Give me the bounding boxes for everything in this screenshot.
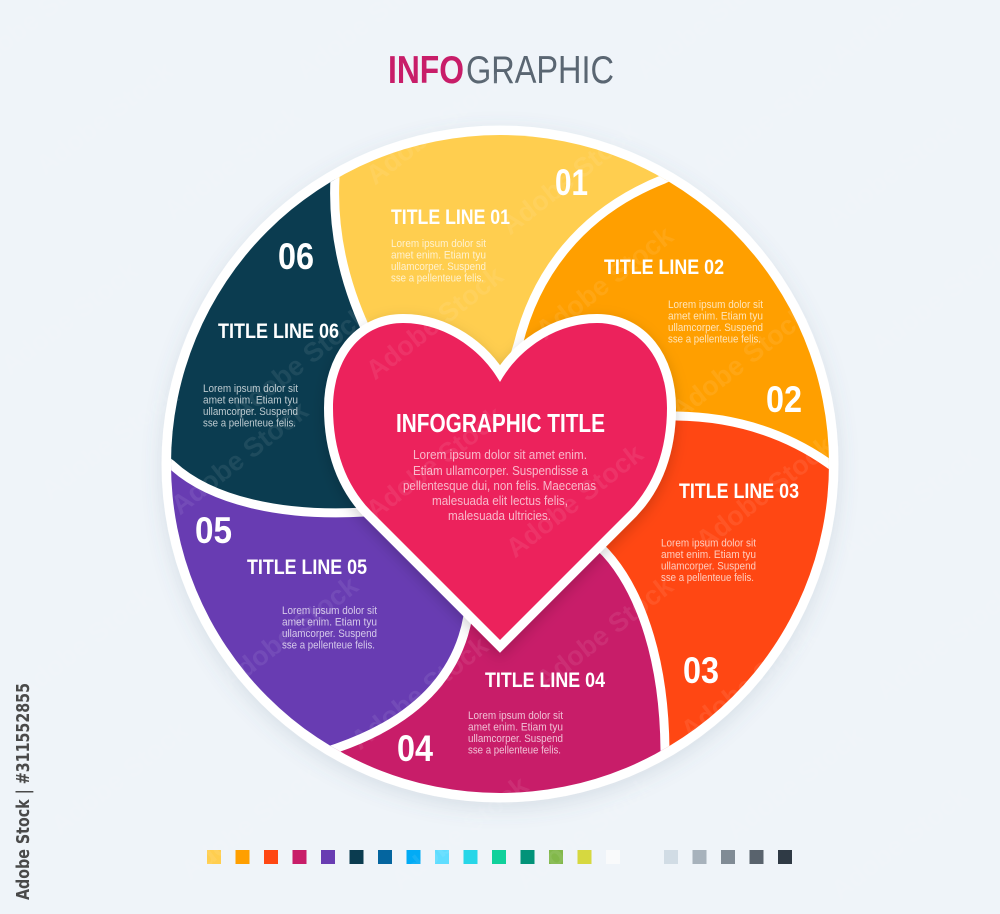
stock watermark overlay: Adobe Stock (215, 570, 364, 696)
segment 03 text (661, 480, 799, 691)
heart text: INFOGRAPHIC TITLE (396, 410, 605, 438)
stock watermark overlay: Adobe Stock (175, 760, 324, 886)
segment 04 text (397, 669, 605, 769)
segment 06 text (203, 236, 339, 430)
white circle ring (162, 126, 838, 802)
heart text: malesuada elit lectus felis, (432, 494, 568, 508)
segment 03 text: amet enim. Etiam tyu (661, 549, 756, 561)
segment 01 text: sse a pellenteue felis. (391, 272, 484, 284)
stock watermark overlay: Adobe Stock (510, 770, 659, 896)
segment 05 text: ullamcorper. Suspend (282, 628, 377, 640)
segment 04 text: amet enim. Etiam tyu (468, 722, 563, 734)
stock watermark overlay: Adobe Stock (360, 65, 509, 191)
stock watermark overlay: Adobe Stock (165, 395, 314, 521)
stock watermark overlay: Adobe Stock (675, 620, 824, 746)
segment 04 text: ullamcorper. Suspend (468, 733, 563, 745)
title: GRAPHIC (466, 49, 614, 92)
segment 05 text: sse a pellenteue felis. (282, 640, 375, 652)
segment 06 text: 06 (278, 236, 314, 277)
wheel segments (171, 135, 829, 793)
heart text: malesuada ultricies. (448, 509, 551, 523)
heart text (396, 410, 605, 523)
stock watermark overlay: Adobe Stock (345, 630, 494, 756)
segment 01 text: amet enim. Etiam tyu (391, 250, 486, 262)
segment 02 text: TITLE LINE 02 (604, 256, 724, 279)
heart text: Etiam ullamcorper. Suspendisse a (413, 464, 588, 478)
segment 03 text: TITLE LINE 03 (679, 480, 799, 503)
segment 02 text: Lorem ipsum dolor sit (668, 299, 763, 311)
segment 01 text: 01 (555, 162, 588, 203)
stock watermark overlay: Adobe Stock (530, 570, 679, 696)
segment 02 text: ullamcorper. Suspend (668, 322, 763, 334)
stock watermark overlay: Adobe Stock (720, 720, 869, 846)
segment 05 text: 05 (195, 510, 232, 551)
stock watermark overlay: Adobe Stock (500, 438, 649, 564)
segment 04 text: 04 (397, 728, 433, 769)
segment 01 text: ullamcorper. Suspend (391, 261, 486, 273)
stock watermark overlay: Adobe Stock (825, 780, 974, 906)
stock watermark overlay: Adobe Stock (695, 55, 844, 181)
segment 05 text: TITLE LINE 05 (247, 556, 367, 579)
segment 01 fill (335, 135, 664, 366)
stock watermark overlay: Adobe Stock (10, 580, 159, 706)
colour palette swatches (207, 850, 792, 864)
stock watermark overlay: Adobe Stock (690, 430, 839, 556)
stock watermark overlay: Adobe Stock (225, 300, 374, 426)
segment 06 text: Lorem ipsum dolor sit (203, 383, 298, 395)
segment 05 text: amet enim. Etiam tyu (282, 616, 377, 628)
segment 01 text (391, 162, 588, 284)
segment 02 text: amet enim. Etiam tyu (668, 310, 763, 322)
stock watermark overlay: Adobe Stock (385, 770, 534, 896)
stock watermark overlay: Adobe Stock (360, 400, 509, 526)
stock watermark overlay: Adobe Stock (820, 108, 969, 234)
stock watermark overlay: Adobe Stock (665, 300, 814, 426)
segment 04 text: Lorem ipsum dolor sit (468, 710, 563, 722)
stock watermark overlay: Adobe Stock (158, 100, 307, 226)
stock watermark overlay: Adobe Stock (495, 115, 644, 241)
segment 03 text: Lorem ipsum dolor sit (661, 538, 756, 550)
segment 04 text: TITLE LINE 04 (485, 669, 605, 692)
stock watermark overlay: Adobe Stock (30, 55, 179, 181)
segment 02 text (604, 256, 802, 420)
segment 04 text: sse a pellenteue felis. (468, 744, 561, 756)
title: INFO (388, 49, 464, 92)
stock watermark overlay: Adobe Stock (45, 715, 194, 841)
segment 06 text: sse a pellenteue felis. (203, 418, 296, 430)
segment 05 fill (171, 465, 464, 749)
segment 06 fill (171, 180, 360, 508)
segment 02 text: 02 (766, 379, 802, 420)
segment 05 text: Lorem ipsum dolor sit (282, 605, 377, 617)
segment 04 fill (336, 553, 665, 793)
segment 05 text (195, 510, 377, 652)
segment 03 text: 03 (683, 650, 719, 691)
heart (333, 323, 667, 640)
stock watermark overlay: Adobe Stock (35, 380, 184, 506)
segment 06 text: TITLE LINE 06 (218, 320, 339, 343)
heart text: Lorem ipsum dolor sit amet enim. (413, 448, 587, 462)
stock watermark overlay: Adobe Stock (360, 260, 509, 386)
segment 02 text: sse a pellenteue felis. (668, 334, 761, 346)
stock watermark overlay: Adobe Stock (835, 440, 984, 566)
white segment dividers (160, 165, 842, 765)
heart text: pellentesque dui, non felis. Maecenas (403, 479, 596, 493)
vertical stock id label: Adobe Stock | #311552855 (13, 683, 34, 900)
segment 01 text: TITLE LINE 01 (391, 206, 510, 229)
title (388, 49, 614, 92)
segment 03 text: ullamcorper. Suspend (661, 560, 756, 572)
segment 06 text: ullamcorper. Suspend (203, 406, 298, 418)
segment 03 fill (606, 420, 829, 748)
stock watermark overlay: Adobe Stock (530, 220, 679, 346)
segment 01 text: Lorem ipsum dolor sit (391, 238, 486, 250)
segment 03 text: sse a pellenteue felis. (661, 572, 754, 584)
segment 06 text: amet enim. Etiam tyu (203, 394, 298, 406)
segment 02 fill (524, 179, 829, 463)
